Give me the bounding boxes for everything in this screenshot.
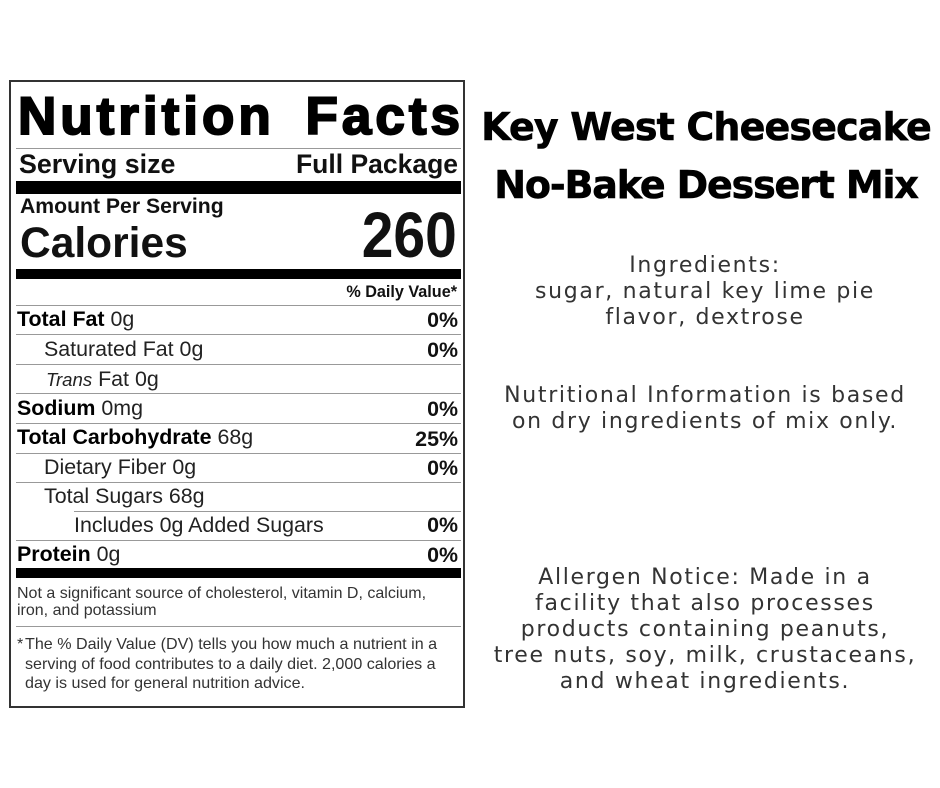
- text: ingredients: [535, 253, 875, 330]
- text: allergen notice: [494, 565, 916, 694]
- title: product name: Key West Cheesecake: [481, 105, 931, 149]
- row: dietary fiber: Dietary Fiber 0g: [44, 455, 196, 479]
- serving size row: Full Package: [296, 149, 458, 179]
- daily value footnote: day is used for general nutrition advice.: [25, 674, 305, 692]
- value: total fat: 0%: [427, 308, 458, 332]
- row: added sugars: Includes 0g Added Sugars: [74, 513, 324, 537]
- amount per serving: Amount Per Serving: [20, 195, 224, 218]
- text: nutritional information note: on dry ingredients of mix only.: [512, 409, 898, 434]
- calories value: 260: [362, 199, 457, 271]
- text: allergen notice: facility that also processes: [535, 591, 875, 616]
- text: nutritional information note: [504, 383, 906, 434]
- not a significant source note: [17, 585, 426, 619]
- row: total fat: Total Fat 0g: [17, 307, 134, 331]
- row: total carbohydrate: Total Carbohydrate 68g: [17, 425, 253, 449]
- serving size row: [19, 149, 458, 179]
- value: total carbohydrate: 25%: [415, 427, 458, 451]
- label border: [9, 80, 465, 708]
- text: allergen notice: and wheat ingredients.: [560, 669, 850, 694]
- row: total sugars: Total Sugars 68g: [44, 484, 205, 508]
- daily value footnote: serving of food contributes to a daily diet. 2,000 calories a: [25, 655, 436, 673]
- title: product name: [481, 105, 931, 207]
- value: sodium: 0%: [427, 397, 458, 421]
- text: nutritional information note: Nutritional Information is based: [504, 383, 906, 408]
- row: saturated fat: Saturated Fat 0g: [44, 337, 203, 361]
- calories label: Calories: [20, 220, 188, 267]
- panel: nutrition facts label: [9, 80, 465, 708]
- text: allergen notice: Allergen Notice: Made in a: [538, 565, 872, 590]
- text: allergen notice: products containing peanuts,: [521, 617, 889, 642]
- value: dietary fiber: 0%: [427, 456, 458, 480]
- heading: Nutrition Facts: Nutrition Facts: [18, 87, 464, 146]
- serving size row: Serving size: [19, 149, 175, 179]
- value: protein: 0%: [427, 543, 458, 567]
- row: sodium: Sodium 0mg: [17, 396, 143, 420]
- title: product name: No-Bake Dessert Mix: [494, 163, 918, 207]
- daily value footnote: The % Daily Value (DV) tells you how much a nutrient in a: [25, 635, 437, 653]
- daily value header: % Daily Value*: [346, 283, 457, 301]
- not a significant source note: Not a significant source of cholesterol, vitamin D, calcium,: [17, 585, 426, 602]
- not a significant source note: iron, and potassium: [17, 602, 157, 619]
- text: ingredients: Ingredients:: [629, 253, 781, 278]
- daily value footnote: *: [17, 635, 23, 653]
- row: protein: Protein 0g: [17, 542, 120, 566]
- text: ingredients: flavor, dextrose: [605, 305, 805, 330]
- text: ingredients: sugar, natural key lime pie: [535, 279, 875, 304]
- value: saturated fat: 0%: [427, 338, 458, 362]
- daily value footnote: [17, 635, 438, 692]
- value: added sugars: 0%: [427, 513, 458, 537]
- text: allergen notice: tree nuts, soy, milk, crustaceans,: [494, 643, 916, 668]
- row: trans fat: Trans Fat 0g: [46, 367, 159, 391]
